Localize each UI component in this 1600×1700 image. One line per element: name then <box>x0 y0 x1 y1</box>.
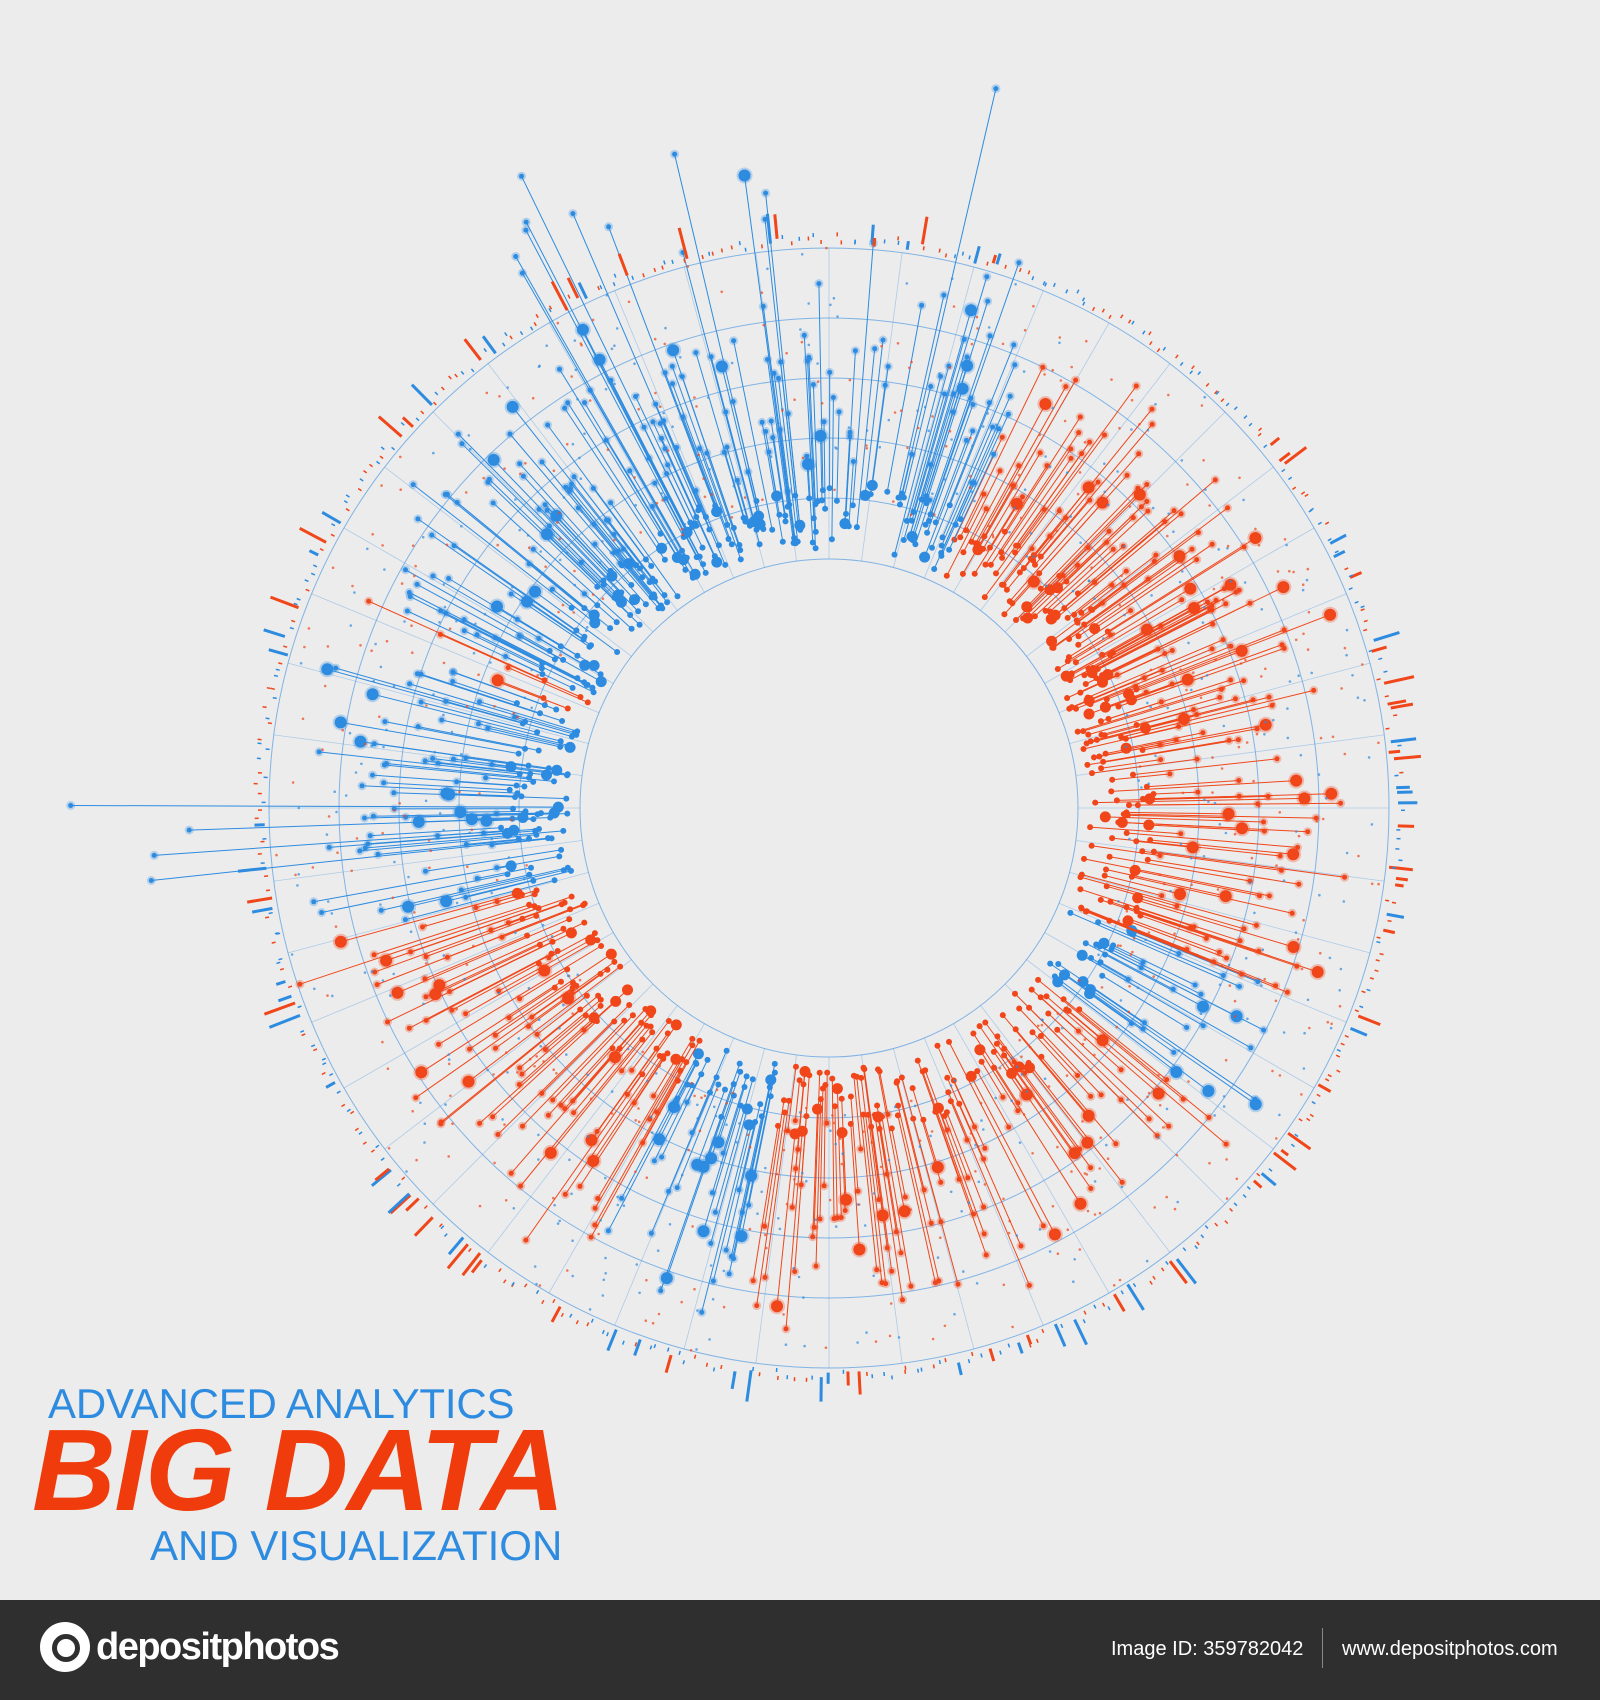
logo <box>40 1622 338 1672</box>
title: advanced analytics: ADVANCED ANALYTICS <box>48 1380 514 1427</box>
title: big data: BIG DATA <box>32 1405 563 1535</box>
website: www.depositphotos.com <box>1342 1638 1558 1660</box>
image id: Image ID: 359782042 <box>1111 1638 1303 1660</box>
footer bar <box>0 1600 1600 1700</box>
logo: depositphotos <box>96 1626 338 1668</box>
subtitle: and visualization: AND VISUALIZATION <box>150 1522 562 1569</box>
grid rings <box>269 248 1389 1368</box>
